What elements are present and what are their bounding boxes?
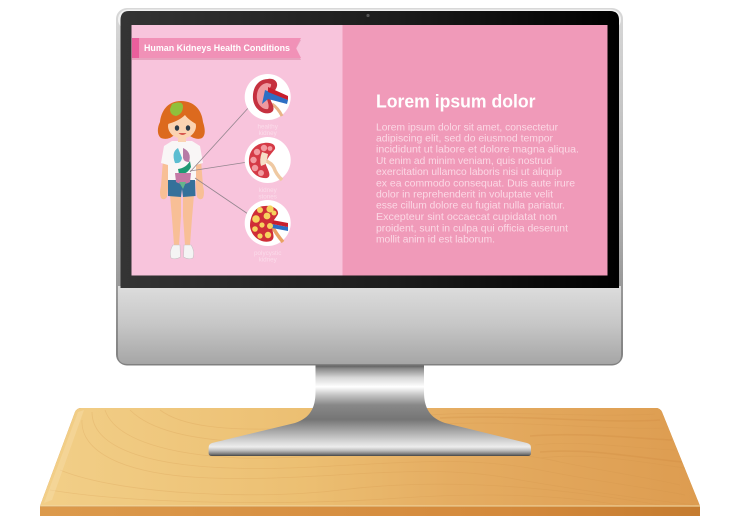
brain highlight	[170, 102, 183, 116]
banner title: Human Kidneys Health Conditions	[144, 43, 290, 54]
legs	[170, 195, 194, 245]
body paragraph: Excepteur sint occaecat cupidatat non	[376, 212, 557, 223]
screen right panel	[342, 25, 608, 276]
monitor bezel	[120, 11, 619, 288]
lungs	[174, 148, 182, 163]
body paragraph: ex ea commodo consequat. Duis aute irure	[376, 178, 575, 189]
neck	[178, 136, 186, 142]
polycystic kidney label: polycystic	[254, 250, 281, 257]
body paragraph: proident, sunt in culpa qui officia deserunt	[376, 223, 568, 234]
ureter	[264, 160, 282, 180]
body paragraph	[376, 122, 579, 245]
cysts	[252, 205, 276, 239]
healthy kidney label: healthy	[258, 124, 279, 130]
body paragraph: incididunt ut labore et dolore magna aliqua.	[376, 145, 579, 156]
vessels	[262, 90, 288, 104]
kidney stones label: stones	[258, 194, 277, 200]
polycystic kidney label	[254, 250, 281, 263]
monitor frame	[116, 8, 623, 366]
body paragraph: adipiscing elit, sed do eiusmod tempor	[376, 133, 554, 144]
connector lines	[190, 106, 251, 216]
ureter	[272, 226, 283, 242]
vessels	[272, 224, 288, 231]
monitor chin	[118, 286, 621, 364]
body paragraph: dolor in reprehenderit in voluptate velit	[376, 190, 553, 201]
healthy kidney circle	[245, 74, 291, 120]
kidney stones circle	[245, 137, 291, 183]
eyes and mouth	[175, 125, 190, 135]
stomach and liver	[178, 161, 191, 174]
monitor	[116, 8, 623, 366]
body paragraph: mollit anim id est laborum.	[376, 234, 495, 245]
healthy kidney label: kidney	[259, 130, 278, 137]
healthy kidney label	[258, 124, 279, 137]
fringe	[168, 110, 196, 124]
kidney stones label	[258, 187, 278, 200]
shoes	[170, 245, 194, 259]
body paragraph: Ut enim ad minim veniam, quis nostrud	[376, 156, 552, 167]
heading: Lorem ipsum dolor	[376, 91, 536, 112]
camera	[366, 14, 370, 17]
wooden desk	[40, 408, 700, 516]
arms	[160, 160, 204, 199]
kidney body	[249, 143, 275, 178]
girl figure	[158, 101, 205, 259]
body paragraph: exercitation ullamco laboris nisi ut aliquip	[376, 167, 562, 178]
banner	[132, 38, 301, 60]
polycystic kidney circle	[245, 200, 291, 246]
pelvis organ	[179, 182, 186, 189]
shirt	[161, 141, 203, 181]
monitor stand	[209, 365, 531, 456]
polycystic kidney label: kidney	[259, 256, 278, 263]
kidney body	[253, 79, 277, 113]
body paragraph: Lorem ipsum dolor sit amet, consectetur	[376, 122, 559, 133]
kidney stones label: kidney	[259, 187, 278, 194]
body paragraph: esse cillum dolore eu fugiat nulla pariatur.	[376, 201, 565, 212]
hair	[158, 101, 205, 139]
intestines	[175, 173, 191, 184]
kidney body	[250, 206, 278, 242]
face	[168, 114, 196, 138]
shorts	[168, 180, 196, 197]
screen left panel	[132, 25, 342, 276]
ureter	[272, 104, 282, 116]
